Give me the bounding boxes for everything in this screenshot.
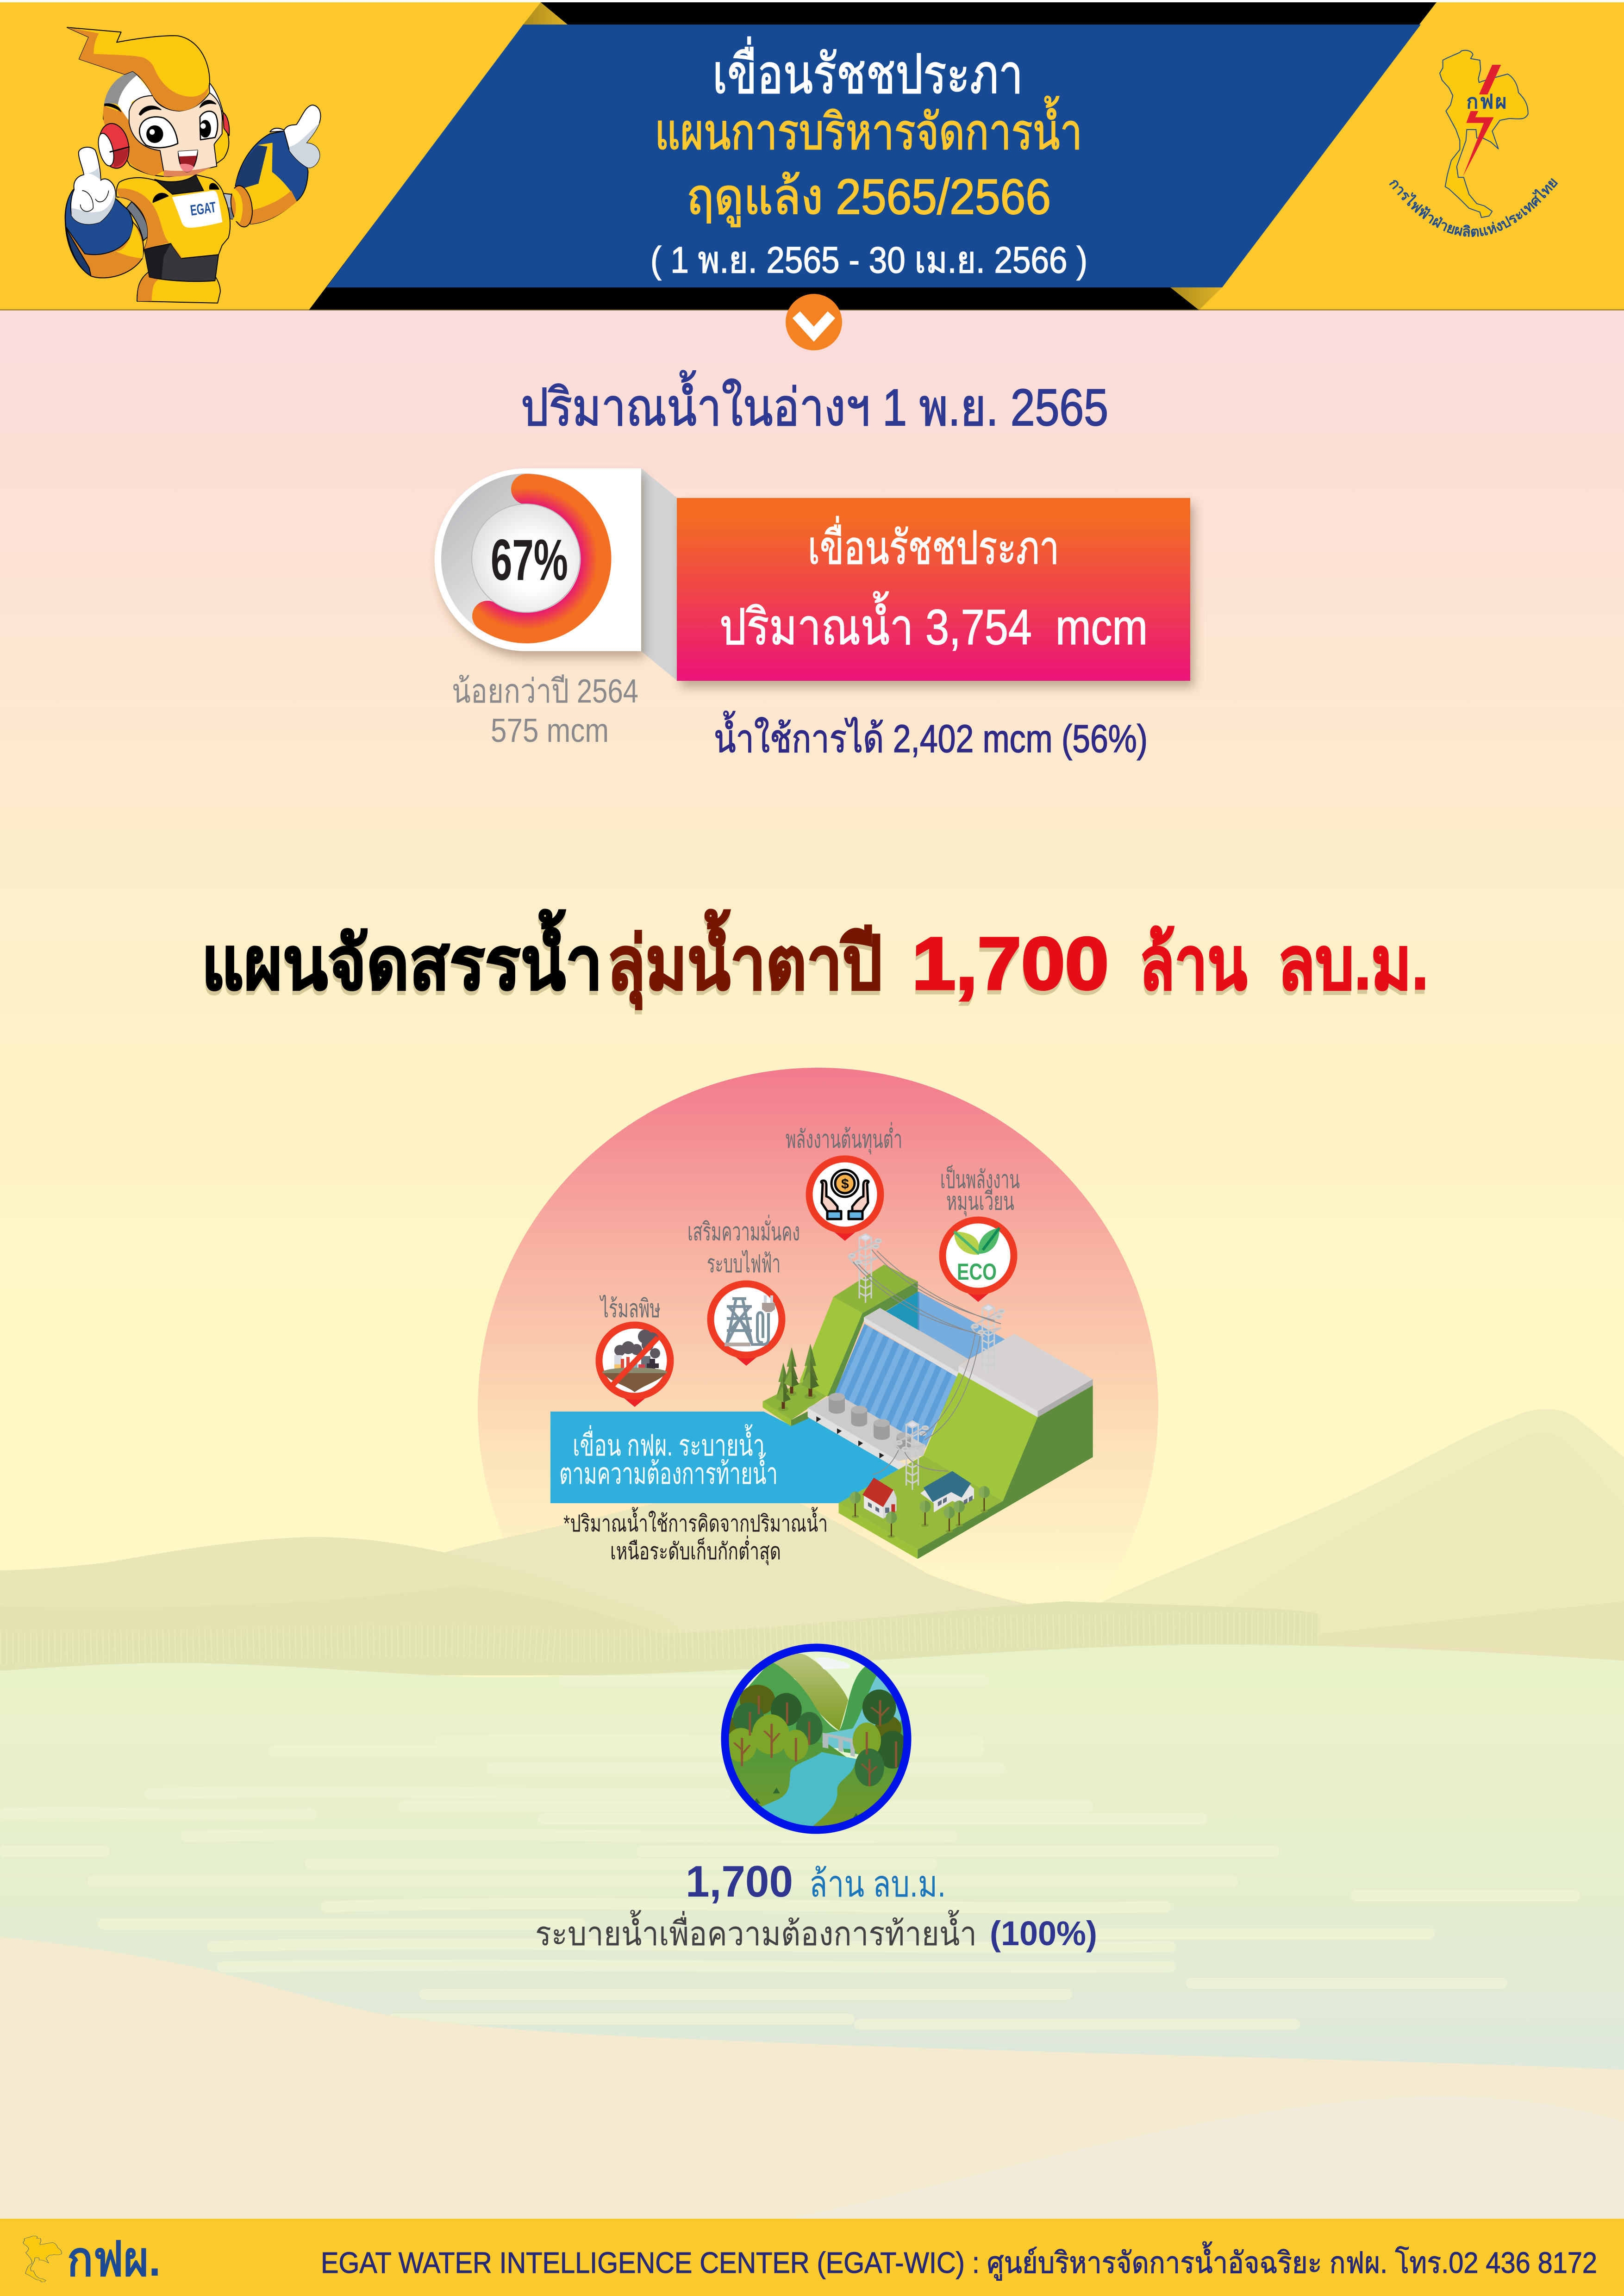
red house [862,1478,897,1518]
header title: dam name: เขื่อนรัชชประภา [712,37,1023,105]
header subtitle: season: ฤดูแล้ง 2565/2566 [687,168,1051,227]
icon: river and forest medallion [721,1644,911,1834]
eco leaf icon [954,1228,999,1285]
panel: storage gauge and volume [434,468,1190,760]
coin in hands icon [821,1170,868,1219]
pin: renewable eco [943,1220,1014,1302]
chevron down badge [786,294,842,350]
pine trees left [775,1363,791,1411]
reservoir [885,1292,918,1331]
gauge dish [441,473,612,644]
header bottom edge [0,309,1624,311]
map outline [1440,50,1528,218]
caption percentage: (100%) [990,1914,1097,1953]
header band [0,2,1624,311]
illustration: isometric dam [762,1234,1093,1559]
section heading: storage on 1 Nov: ปริมาณน้ำในอ่างฯ 1 พ.ย. 2565 [521,370,1108,436]
eco leaf icon: ECO [957,1259,997,1285]
small trees [849,1492,861,1518]
line two: ระบบไฟฟ้า [707,1250,781,1278]
pin: no pollution [599,1325,670,1407]
heading part one: แผนจัดสรรน้ำ [201,909,603,1005]
label: low cost energy: พลังงานต้นทุนต่ำ [786,1122,902,1155]
header right yellow panel [1199,2,1624,310]
heading part five: unit: ลบ.ม. [1278,922,1429,1005]
header blue parallelogram [326,25,1421,287]
heading part four: million: ล้าน [1139,922,1247,1005]
lightning bolt [1463,65,1501,177]
curved organisation name [1388,183,1558,236]
gauge 67 percent ring [487,489,596,628]
tree platform [762,1376,836,1426]
value: 1,700 [686,1857,793,1906]
line two: เหนือระดับเก็บกักต่ำสุด [610,1536,781,1565]
spillway [835,1324,957,1448]
right embankment [924,1373,1037,1501]
box label: dam name: เขื่อนรัชชประภา [808,516,1059,574]
line one: เขื่อน กฟผ. ระบายน้ำ [573,1424,765,1462]
mascot: EGAT robot character [65,27,320,303]
header black trapezoid [309,2,1437,310]
tower by houses [895,1421,928,1490]
header date range: ( 1 พ.ย. 2565 - 30 เม.ย. 2566 ) [650,239,1087,280]
footnote [563,1507,828,1565]
mascot: EGAT robot character: EGAT [189,199,217,219]
comparison with 2564: น้อยกว่าปี 2564 [452,673,638,710]
dam crest [864,1308,969,1373]
stat caption [535,1910,1097,1953]
logo letters: กฟผ [1466,91,1507,113]
comparison value: 575 mcm [491,712,609,749]
header subtitle: plan: แผนการบริหารจัดการน้ำ [655,96,1082,160]
usable water: น้ำใช้การได้ 2,402 mcm (56%) [714,711,1148,760]
heading part three: volume: 1,700 [912,922,1109,1005]
turbine tanks [829,1397,911,1450]
heading part two: ลุ่มน้ำตาปี [607,909,882,1010]
line one: เสริมความมั่นคง [687,1214,800,1246]
lower base [839,1456,1003,1549]
power lines [853,1250,1001,1475]
line two: หมุนเวียน [946,1188,1014,1217]
organisation name text: การไฟฟ้าฝ่ายผลิตแห่งประเทศไทย [1386,174,1561,240]
volume box [677,498,1190,681]
stat: 1,700 million cubic metres [686,1857,946,1906]
powerhouse platform [808,1393,926,1461]
hill [833,1264,918,1313]
gauge value: 67% [491,528,568,592]
connector side panel [641,468,677,681]
banner text [559,1424,778,1490]
box label: volume: ปริมาณน้ำ 3,754 mcm [719,591,1148,655]
caption text: ระบายน้ำเพื่อความต้องการท้ายน้ำ [535,1910,977,1953]
sun circle backdrop [478,1068,1158,1748]
blue house [920,1471,974,1512]
coin in hands icon: $ [841,1176,849,1192]
pine trees [801,1344,819,1399]
unit: ล้าน ลบ.ม. [809,1863,946,1904]
fold triangle bottom [1170,287,1222,310]
landscape: mountains, water, sand [0,1409,1624,2219]
pin: low cost energy [809,1159,881,1241]
footer logo map [23,2236,62,2282]
transmission towers [848,1234,881,1303]
gauge centre [472,504,580,612]
illustration: water release banner [550,1412,899,1503]
main heading: allocation plan [201,909,1429,1010]
tower on crest [971,1304,1004,1373]
polluted island icon [602,1330,667,1392]
label: grid security [687,1214,800,1278]
line two: ตามความต้องการท้ายน้ำ [559,1452,778,1490]
gauge white plate [434,468,641,651]
line one: เป็นพลังงาน [940,1165,1020,1194]
pine tree back [784,1347,799,1396]
label: renewable energy [940,1165,1020,1217]
pin: grid security [711,1284,782,1366]
footer logo text: กฟผ. [67,2233,161,2286]
footer bar [0,2219,1624,2296]
label: no pollution: ไร้มลพิษ [599,1294,661,1323]
header left yellow panel [0,2,541,310]
fold triangle top [523,2,568,25]
line one: *ปริมาณน้ำใช้การคิดจากปริมาณน้ำ [563,1507,828,1537]
tower and plug icon [725,1295,775,1346]
logo: Thailand map with EGAT bolt [1386,50,1561,240]
